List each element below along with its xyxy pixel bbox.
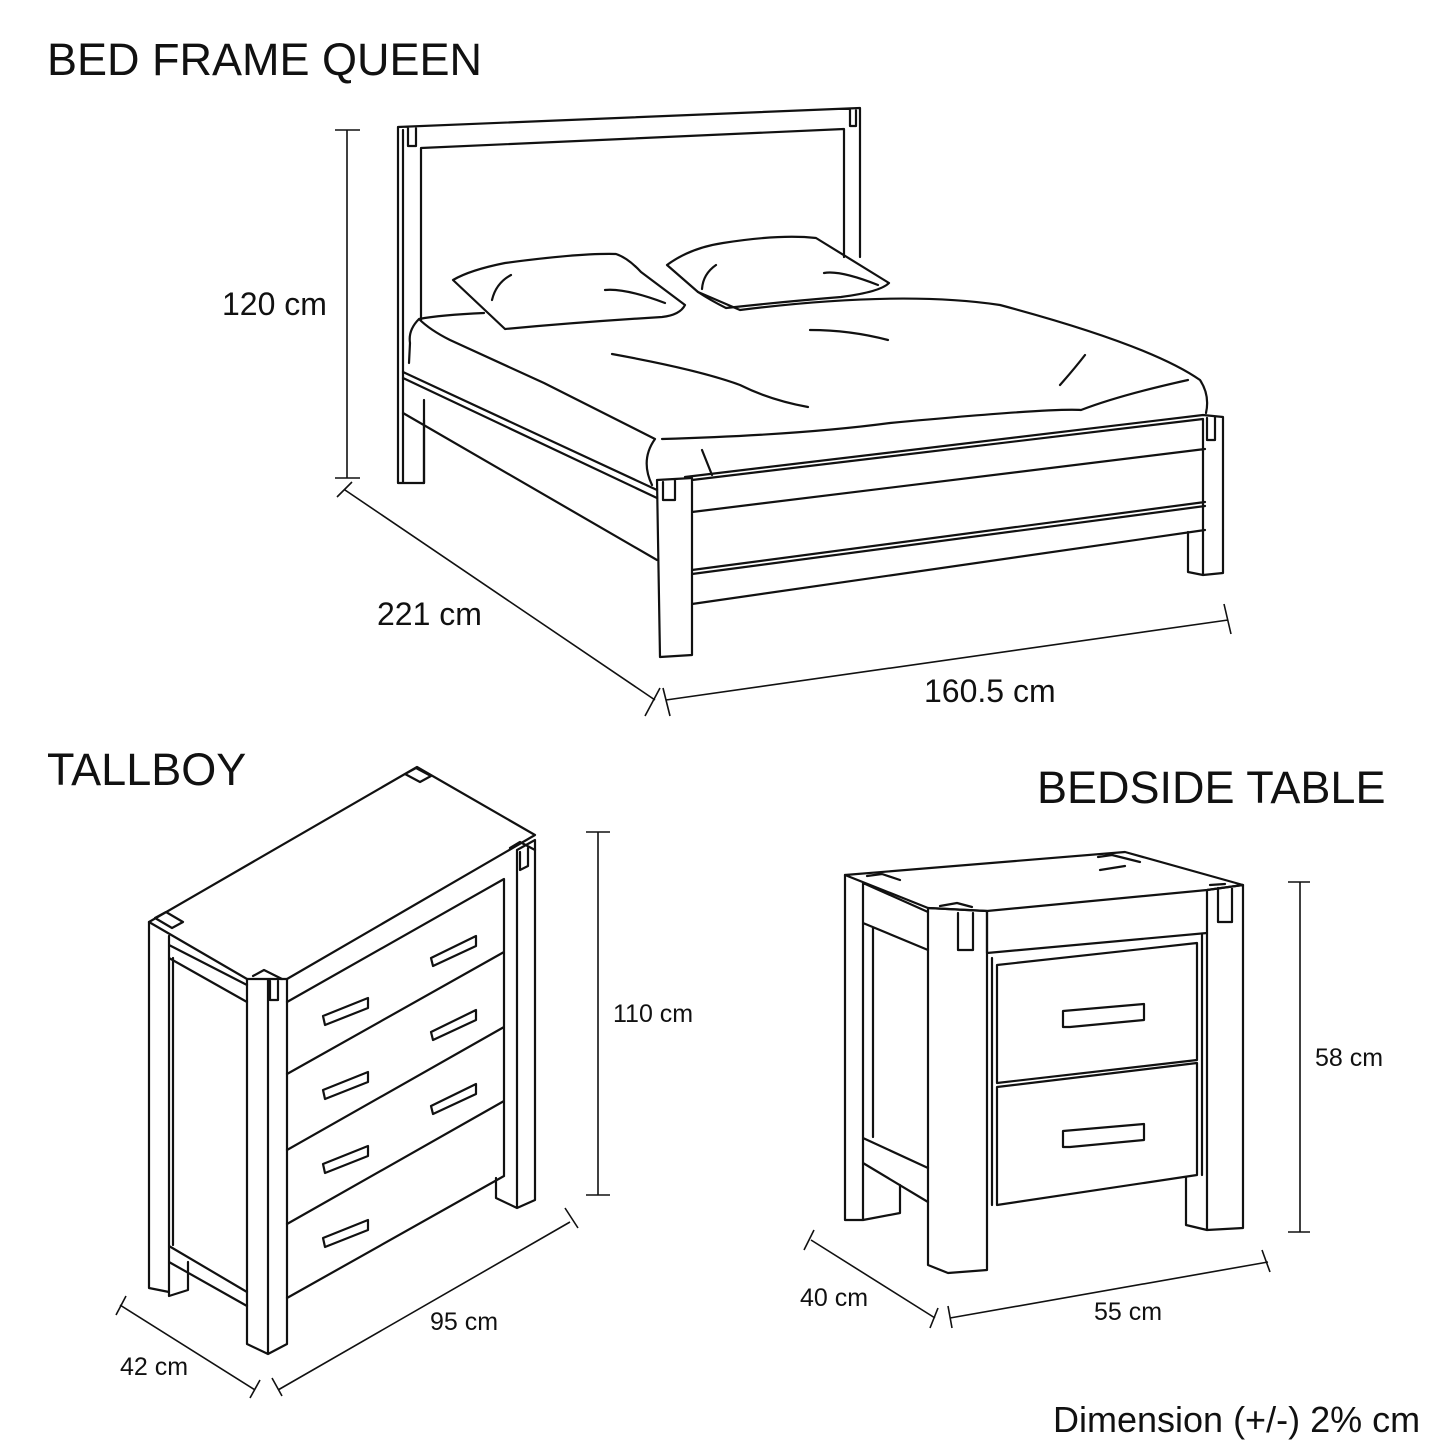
title: bed frame queen: BED FRAME QUEEN xyxy=(47,34,482,85)
top surface xyxy=(149,767,535,979)
dimension: 95 cm xyxy=(272,1208,578,1396)
mattress xyxy=(409,292,1207,485)
handles xyxy=(323,936,476,1247)
dimension: 110 cm: 110 cm xyxy=(613,1000,693,1028)
dimension: 55 cm: 55 cm xyxy=(1094,1298,1162,1326)
dimension: 42 cm: 42 cm xyxy=(120,1353,188,1381)
drawers xyxy=(287,879,504,1298)
footnote: tolerance: Dimension (+/-) 2% cm xyxy=(1053,1399,1420,1440)
drawing: tallboy xyxy=(149,767,535,1354)
dimension: 221 cm xyxy=(337,482,660,716)
dimension: 221 cm: 221 cm xyxy=(377,596,482,632)
dimension: 95 cm: 95 cm xyxy=(430,1308,498,1336)
title: tallboy: TALLBOY xyxy=(47,744,246,795)
drawers xyxy=(992,935,1202,1205)
right post xyxy=(1186,885,1243,1230)
dimension: 110 cm xyxy=(586,832,693,1195)
dimension: 120 cm: 120 cm xyxy=(222,286,327,322)
dimension: 58 cm xyxy=(1288,882,1383,1232)
title: bedside table: BEDSIDE TABLE xyxy=(1037,762,1385,813)
dimension: 160.5 cm xyxy=(663,604,1231,716)
dimension: 55 cm xyxy=(948,1250,1270,1328)
dimension: 40 cm xyxy=(800,1230,938,1328)
back left post and side xyxy=(845,875,928,1220)
dimension: 58 cm: 58 cm xyxy=(1315,1044,1383,1072)
headboard xyxy=(398,108,860,483)
front post xyxy=(247,979,287,1354)
dimension: 160.5 cm: 160.5 cm xyxy=(924,673,1056,709)
pillows xyxy=(453,237,889,329)
dimension: 42 cm xyxy=(116,1296,260,1398)
side rail xyxy=(403,372,657,560)
handles xyxy=(1063,1004,1144,1147)
right post xyxy=(496,840,535,1208)
top xyxy=(845,852,1243,953)
front left post xyxy=(928,908,987,1273)
drawing: bed xyxy=(398,108,1223,657)
drawing: bedside table xyxy=(845,852,1243,1273)
left post and side panel xyxy=(149,922,247,1306)
footboard xyxy=(657,415,1223,657)
dimension: 120 cm xyxy=(222,130,360,478)
dimension: 40 cm: 40 cm xyxy=(800,1284,868,1312)
